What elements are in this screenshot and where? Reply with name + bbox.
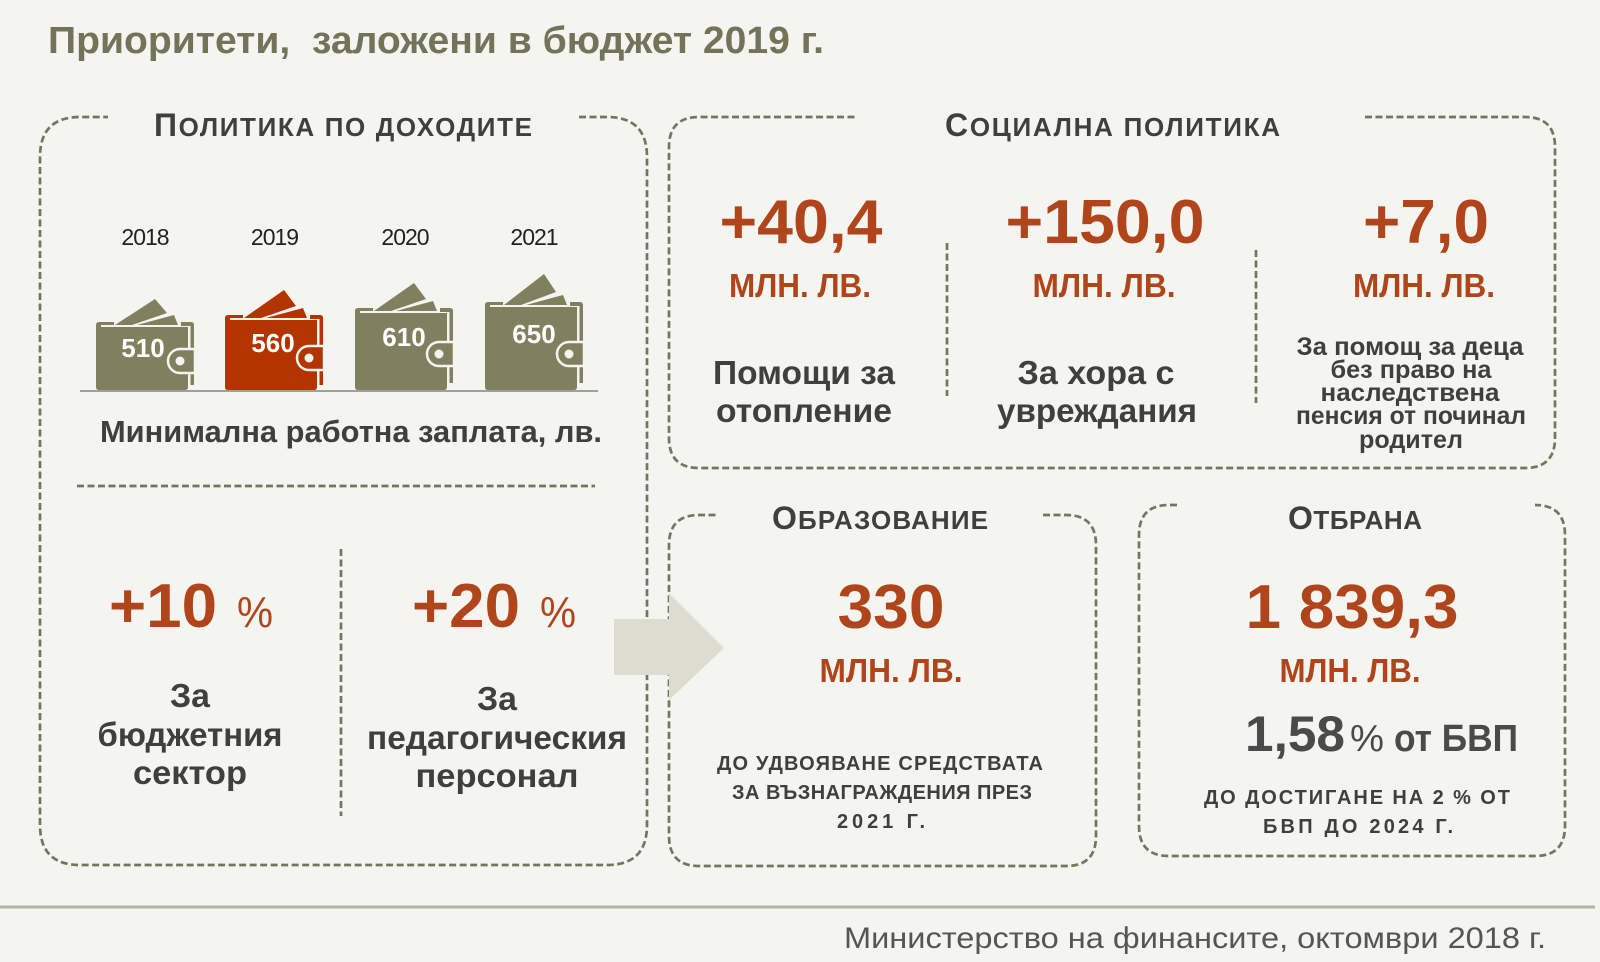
- label: pedagogical staff: педагогическия: [367, 719, 627, 756]
- stat: defence amount: 1 839,3: [1246, 573, 1458, 642]
- stat: people with disabilities: За хора с: [1018, 354, 1174, 391]
- stat: children aid: +7,0: [1363, 188, 1489, 257]
- panel: income policy: [40, 107, 647, 865]
- stat: people with disabilities: увреждания: [997, 392, 1197, 429]
- text: defence note: БВП ДО 2024 Г.: [1263, 816, 1453, 838]
- stat: heating aid: МЛН. ЛВ.: [729, 267, 871, 304]
- stat: defence amount: МЛН. ЛВ.: [1280, 652, 1420, 689]
- stat: heating aid: отопление: [716, 392, 892, 429]
- stat: education amount: 330: [838, 573, 944, 642]
- label: pedagogical staff: персонал: [416, 757, 578, 794]
- stat: heating aid: [713, 188, 896, 429]
- heading: education: ОБРАЗОВАНИЕ: [772, 500, 988, 536]
- wallet 2021: 650: 650: [512, 319, 556, 349]
- stat: share of GDP: %: [1350, 718, 1384, 760]
- text: defence note: ДО ДОСТИГАНЕ НА 2 % ОТ: [1204, 787, 1510, 809]
- stat: heating aid: Помощи за: [713, 354, 896, 391]
- stat: +20 %: %: [540, 588, 576, 637]
- text: education note: ЗА ВЪЗНАГРАЖДЕНИЯ ПРЕЗ: [732, 782, 1032, 804]
- panel frame: income policy: [40, 117, 647, 865]
- label: pedagogical staff: [367, 680, 627, 794]
- stat: people with disabilities: +150,0: [1006, 188, 1204, 257]
- heading: income policy: ПОЛИТИКА ПО ДОХОДИТЕ: [154, 107, 532, 143]
- text: education note: 2021 Г.: [837, 811, 925, 833]
- wallet 2018: 510: 510: [121, 333, 165, 363]
- stat: children aid: За помощ за деца: [1296, 333, 1525, 361]
- text: education note: ДО УДВОЯВАНЕ СРЕДСТВАТА: [717, 753, 1043, 775]
- label: budget sector: За: [170, 677, 211, 714]
- wallet 2019: 560: [225, 290, 324, 390]
- stat: +20 %: +20: [412, 572, 520, 641]
- stat: heating aid: +40,4: [720, 188, 883, 257]
- stat: children aid: пенсия от починал: [1296, 402, 1526, 430]
- stat: education amount: МЛН. ЛВ.: [820, 652, 962, 689]
- stat: children aid: [1296, 188, 1526, 454]
- stat: +10 %: [109, 572, 273, 641]
- panel: education: [669, 500, 1096, 866]
- heading: defence: ОТБРАНА: [1288, 500, 1422, 536]
- stat: children aid: наследствена: [1320, 379, 1501, 407]
- year labels: [121, 224, 558, 250]
- year labels: 2019: [251, 224, 298, 250]
- text: defence note: [1204, 787, 1510, 838]
- stat: people with disabilities: МЛН. ЛВ.: [1032, 267, 1176, 304]
- wallet 2018: 510: [96, 299, 195, 390]
- wallet 2020: 610: [355, 283, 454, 390]
- arrow: [614, 593, 724, 700]
- wallet 2021: 650: [485, 274, 584, 390]
- stat: children aid: без право на: [1330, 356, 1493, 384]
- year labels: 2021: [510, 224, 558, 250]
- panel frame: education: [669, 515, 1096, 866]
- label: budget sector: [98, 677, 282, 791]
- chart caption: Минимална работна заплата, лв.: [100, 414, 602, 449]
- stat: education amount: [820, 573, 962, 689]
- panel: defence: [1139, 500, 1565, 856]
- stat: people with disabilities: [997, 188, 1204, 429]
- stat: share of GDP: [1245, 706, 1518, 762]
- chart baseline: [80, 390, 598, 392]
- year labels: 2018: [121, 224, 169, 250]
- heading: social policy: СОЦИАЛНА ПОЛИТИКА: [945, 107, 1280, 143]
- footer source: Министерство на финансите, октомври 2018 г.: [844, 922, 1546, 955]
- stat: children aid: родител: [1359, 426, 1463, 454]
- label: pedagogical staff: За: [477, 680, 518, 717]
- title: Приоритети, заложени в бюджет 2019 г.: [48, 20, 824, 62]
- wallet chart: minimum wage: [80, 224, 602, 449]
- stat: +10 %: +10: [109, 572, 217, 641]
- label: budget sector: сектор: [133, 754, 247, 791]
- stat: +10 %: %: [237, 588, 273, 637]
- panel: social policy: [669, 107, 1555, 468]
- wallet 2019: 560: 560: [251, 328, 295, 358]
- year labels: 2020: [381, 224, 429, 250]
- stat: share of GDP: 1,58: [1245, 706, 1345, 762]
- stat: defence amount: [1246, 573, 1458, 689]
- stat: share of GDP: от БВП: [1394, 718, 1518, 760]
- stat: +20 %: [412, 572, 576, 641]
- panel frame: defence: [1139, 505, 1565, 856]
- wallet 2020: 610: 610: [382, 322, 426, 352]
- panel frame: social policy: [669, 117, 1555, 468]
- label: budget sector: бюджетния: [98, 716, 282, 753]
- text: education note: [717, 753, 1043, 833]
- stat: children aid: МЛН. ЛВ.: [1353, 267, 1495, 304]
